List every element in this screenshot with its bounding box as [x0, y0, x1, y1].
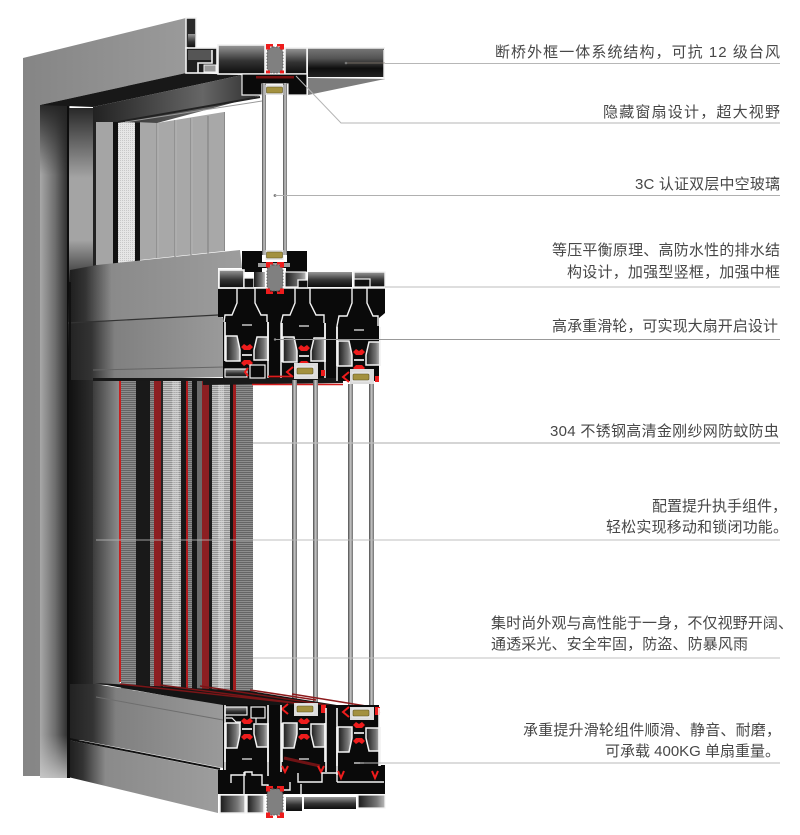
left column with gradient — [40, 105, 69, 778]
leader line: pulley — [274, 338, 780, 341]
top glass frame — [242, 74, 307, 95]
lower rails — [231, 772, 384, 795]
label: outer frame: 断桥外框一体系统结构，可抗 12 级台风 — [495, 44, 780, 61]
label: lift roller assembly: 承重提升滑轮组件顺滑、静音、耐磨， — [523, 722, 781, 739]
label: stainless screen: 304 不锈钢高清金刚纱网防蚊防虫 — [550, 423, 779, 440]
sash 2 bottom with glass — [287, 363, 325, 379]
leader line: lift roller — [360, 762, 780, 764]
upper back panel — [140, 112, 225, 260]
label: appearance and performance: 集时尚外观与高性能于一身，不仅视野开阔、 — [491, 615, 793, 632]
label: drainage design — [552, 241, 780, 281]
left bottom chamber — [225, 365, 265, 378]
sash profiles — [225, 322, 268, 366]
lower right sash — [337, 707, 380, 778]
sash 3 bottom with glass — [343, 369, 379, 384]
leader line: glass — [274, 194, 780, 197]
upper sill block — [242, 251, 307, 272]
leader line: handle — [96, 539, 780, 541]
neck and hook outlines — [224, 288, 378, 326]
top frame outer section — [186, 18, 385, 95]
middle frame left faces — [68, 250, 242, 382]
lower left sash — [225, 705, 268, 776]
leader line: hidden sash — [296, 76, 780, 123]
label: drainage design: 构设计，加强型竖框，加强中框 — [567, 264, 780, 281]
middle frame cross-section — [218, 251, 385, 384]
label: appearance and performance: 通透采光、安全牢固，防盗、防暴风雨 — [491, 635, 748, 653]
label: handle — [606, 498, 788, 536]
mosquito screen stripes — [121, 380, 253, 695]
label: lift roller assembly: 可承载 400KG 单扇重量。 — [605, 743, 780, 760]
wall frame: outer face — [23, 18, 186, 778]
top frame underside — [40, 73, 262, 123]
label: heavy pulley: 高承重滑轮，可实现大扇开启设计 — [552, 318, 778, 335]
glass pane — [262, 83, 287, 260]
lower jamb column — [70, 380, 121, 740]
upper inner jamb — [69, 108, 140, 285]
inner dark column — [69, 280, 93, 740]
lower middle sash — [281, 703, 326, 772]
label: handle: 配置提升执手组件， — [652, 498, 787, 515]
label: handle: 轻松实现移动和锁闭功能。 — [606, 519, 788, 536]
vertical members — [268, 322, 337, 381]
lower sliding glass panes — [292, 380, 374, 714]
top chambers row — [218, 262, 385, 294]
label: hidden sash: 隐藏窗扇设计，超大视野 — [603, 103, 780, 121]
label: appearance and performance — [491, 615, 793, 653]
bottom frame faces — [67, 684, 223, 813]
leader line: frame — [345, 62, 780, 64]
label: lift roller assembly — [523, 722, 781, 760]
screen top dark rail — [93, 378, 343, 385]
leader line: screen — [253, 442, 780, 444]
bottom frame track lines — [95, 683, 380, 714]
label: drainage design: 等压平衡原理、高防水性的排水结 — [552, 241, 780, 259]
leader line: appearance — [253, 657, 780, 659]
lower frame chambers — [220, 786, 385, 818]
label: glass: 3C 认证双层中空玻璃 — [635, 176, 780, 193]
bottom frame cross-section — [218, 703, 385, 818]
leader line: drainage — [385, 286, 780, 288]
red bottom rail — [268, 376, 293, 378]
